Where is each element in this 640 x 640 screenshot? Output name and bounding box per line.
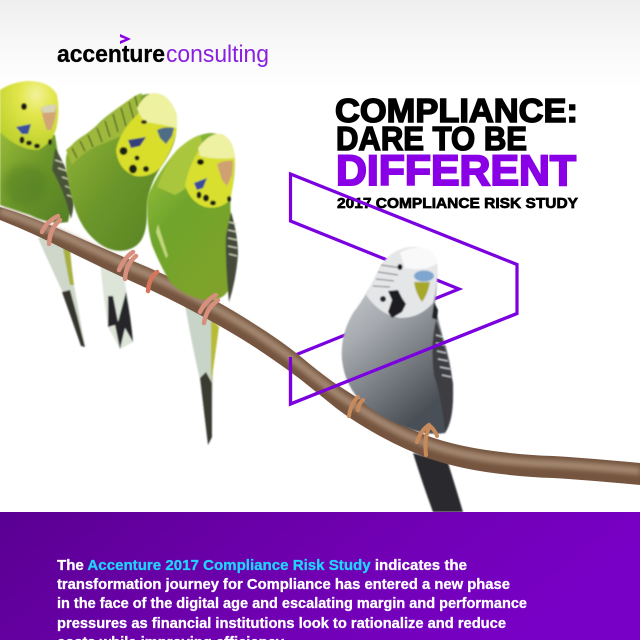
- chevron front segment: [290, 314, 517, 404]
- head: [366, 247, 437, 318]
- branch: [0, 207, 640, 485]
- beak: [414, 282, 430, 302]
- beak: [217, 161, 233, 186]
- body: [342, 247, 453, 434]
- flank marks: [156, 224, 168, 258]
- body: [147, 133, 236, 300]
- background gradient: [0, 0, 640, 88]
- bird 1: green left: [0, 81, 74, 223]
- body: [66, 94, 176, 251]
- cheek: [16, 124, 31, 134]
- feet of green birds: [42, 216, 218, 323]
- throat spots: [20, 136, 52, 148]
- line 4: pressures as financial institutions look to rationalize and reduce: [57, 615, 506, 632]
- crown: [198, 134, 235, 159]
- eye: [197, 159, 204, 165]
- logo: accenture consulting: [57, 34, 269, 68]
- panel body text: [57, 557, 527, 640]
- title: [335, 93, 578, 212]
- logo consulting: consulting: [166, 41, 269, 68]
- beak: [157, 127, 174, 144]
- eye: [21, 103, 27, 110]
- throat marks: [432, 302, 438, 320]
- bird 3: green right: [147, 133, 238, 302]
- tails of green birds: [38, 236, 219, 445]
- eye: [398, 264, 402, 270]
- line 3: in the face of the digital age and escalating margin and performance: [57, 595, 527, 612]
- cheek and spots: [128, 137, 146, 148]
- crown: [400, 248, 438, 269]
- nape: [157, 135, 204, 195]
- body: [0, 125, 70, 223]
- line 1: The Accenture 2017 Compliance Risk Study indicates the: [57, 557, 467, 574]
- cere: [414, 270, 434, 282]
- logo chevron: [120, 34, 131, 44]
- back stripes: [66, 93, 146, 165]
- face: [185, 142, 235, 208]
- subtitle: 2017 COMPLIANCE RISK STUDY: [337, 195, 578, 212]
- wing: [52, 148, 74, 219]
- cheek patch: [388, 290, 406, 318]
- neck barring: [373, 265, 401, 287]
- face: [116, 112, 177, 176]
- purple panel: [0, 512, 640, 640]
- wing: [226, 212, 238, 302]
- title line 2: DARE TO BE: [336, 121, 527, 158]
- crown: [137, 93, 177, 128]
- title line 3: DIFFERENT: [336, 147, 576, 195]
- beak: [41, 105, 56, 130]
- branch body: [0, 207, 640, 485]
- large chevron outline: [290, 174, 517, 404]
- line 2: transformation journey for Compliance has entered a new phase: [57, 576, 510, 593]
- wing: [432, 320, 453, 433]
- grey bird: [342, 247, 453, 434]
- head: [0, 81, 58, 150]
- belly shading: [3, 165, 47, 205]
- photo: budgerigars on branch: [0, 81, 640, 512]
- wing stripes: [55, 160, 73, 197]
- branch highlight: [0, 211, 640, 471]
- logo accenture: accenture: [57, 41, 165, 68]
- cheek and spots: [194, 178, 207, 190]
- eye: [141, 120, 147, 124]
- bird 2: green middle: [66, 93, 177, 251]
- grey bird tail: [413, 453, 463, 512]
- title line 1: COMPLIANCE:: [335, 93, 578, 130]
- feet of grey bird: [349, 397, 437, 455]
